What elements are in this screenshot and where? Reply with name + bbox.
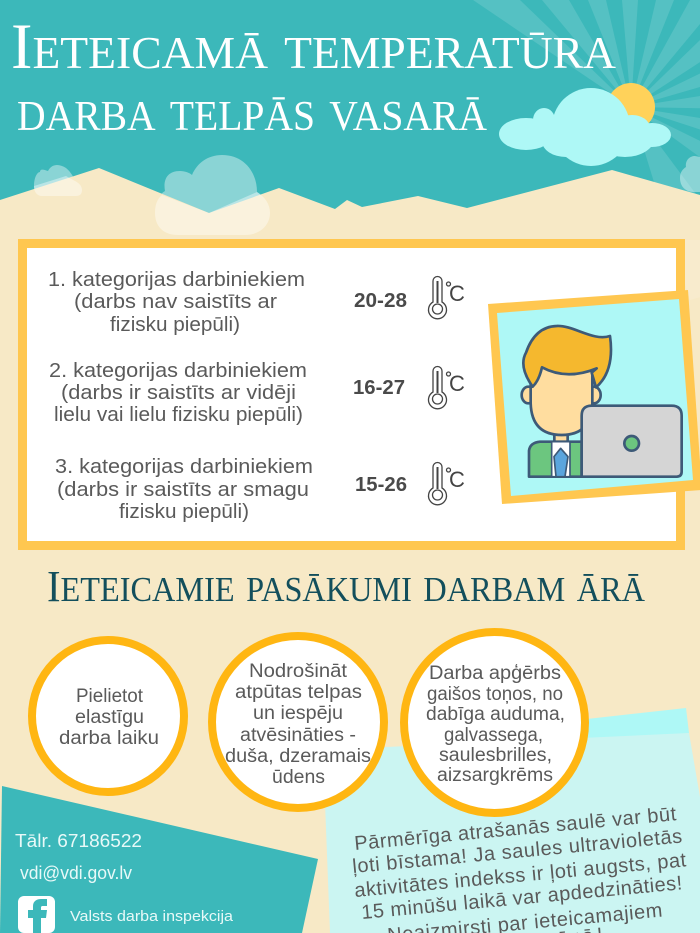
text: category 3: fizisku piepūli) — [119, 501, 249, 523]
circle: rest rooms: ūdens — [272, 767, 325, 788]
note: sun warning: ļoti bīstama! Ja saules ultravioletās — [351, 825, 683, 878]
circle: clothing: dabīga auduma, — [426, 704, 565, 725]
circle: clothing: aizsargkrēms — [437, 765, 553, 786]
sun rays — [473, 0, 700, 300]
text: category 2 — [49, 360, 307, 426]
icon: thermometer 3: C — [449, 467, 465, 492]
circle: flexible hours: elastīgu — [75, 707, 144, 728]
teal sky — [0, 0, 700, 215]
text: category 3 — [55, 456, 313, 523]
photo frame: office worker — [488, 290, 700, 504]
circle: clothing: Darba apģērbs — [429, 663, 561, 684]
panel: contacts — [0, 786, 318, 933]
title — [11, 11, 616, 143]
text: category 2: (darbs ir saistīts ar vidēji — [61, 382, 296, 404]
title: darba telpās vasarā — [17, 77, 488, 143]
text: category 2: lielu vai lielu fizisku piepūli) — [54, 404, 303, 426]
text: category 3: (darbs ir saistīts ar smagu — [57, 479, 309, 501]
circle: rest rooms: un iespēju — [253, 703, 343, 724]
phone: Tālr. 67186522 — [15, 831, 142, 851]
title: Ieteicamā temperatūra — [11, 11, 616, 83]
sun — [607, 83, 655, 131]
faint cloud: right edge — [680, 156, 700, 192]
faint cloud: small left — [34, 165, 82, 196]
text: category 1: fizisku piepūli) — [110, 314, 240, 336]
icon: thermometer 1 — [428, 276, 465, 319]
icon: thermometer 3 — [428, 462, 465, 505]
cloud in front of sun — [499, 88, 671, 166]
faint cloud overlays on mountains — [34, 176, 270, 235]
note: sun warning: aktivitātes indekss ir ļoti augsts, pat — [353, 849, 687, 902]
panel: indoor temperature categories — [22, 244, 680, 546]
circle: rest rooms — [212, 636, 384, 808]
circle: flexible hours: darba laiku — [59, 728, 159, 749]
icon: thermometer 1: C — [449, 281, 465, 306]
note: sun warning: 15 minūšu laikā var apdedzināties! — [360, 872, 683, 924]
text: category 1: (darbs nav saistīts ar — [74, 291, 277, 313]
mountains — [0, 168, 700, 240]
heading: outdoor measures: Ieteicamie pasākumi darbam ārā — [47, 556, 646, 612]
email: vdi@vdi.gov.lv — [20, 863, 132, 883]
value: 20-28: 20-28 — [354, 290, 407, 312]
circle: flexible hours: Pielietot — [76, 686, 144, 707]
note: sun warning: Pārmērīga atrašanās saulē var būt — [353, 803, 678, 855]
circle: rest rooms: atvēsināties - — [240, 725, 356, 746]
circle: rest rooms: Nodrošināt — [249, 661, 348, 682]
value: 15-26: 15-26 — [355, 474, 407, 496]
text: category 3: 3. kategorijas darbiniekiem — [55, 456, 313, 478]
facebook name: Valsts darba inspekcija — [70, 908, 234, 925]
icon: thermometer 2 — [428, 366, 465, 409]
circle: clothing — [404, 632, 585, 813]
text: category 2: 2. kategorijas darbiniekiem — [49, 360, 307, 382]
illustration: man with laptop — [522, 326, 682, 477]
circle: rest rooms: atpūtas telpas — [235, 682, 362, 703]
value: 16-27: 16-27 — [353, 377, 405, 399]
note: sun warning — [323, 733, 700, 933]
circle: clothing: gaišos toņos, no — [427, 684, 563, 705]
faint cloud: large centre — [155, 155, 270, 235]
text: category 1: 1. kategorijas darbiniekiem — [48, 269, 305, 291]
icon: thermometer 2: C — [449, 371, 465, 396]
note: back sheet — [560, 708, 689, 745]
circle: clothing: galvassega, — [444, 725, 543, 746]
circle: rest rooms: duša, dzeramais — [225, 746, 371, 767]
icon: facebook — [18, 896, 55, 933]
circle: clothing: saulesbrilles, — [439, 745, 552, 766]
circle: flexible hours — [32, 640, 184, 792]
text: category 1 — [48, 269, 305, 336]
